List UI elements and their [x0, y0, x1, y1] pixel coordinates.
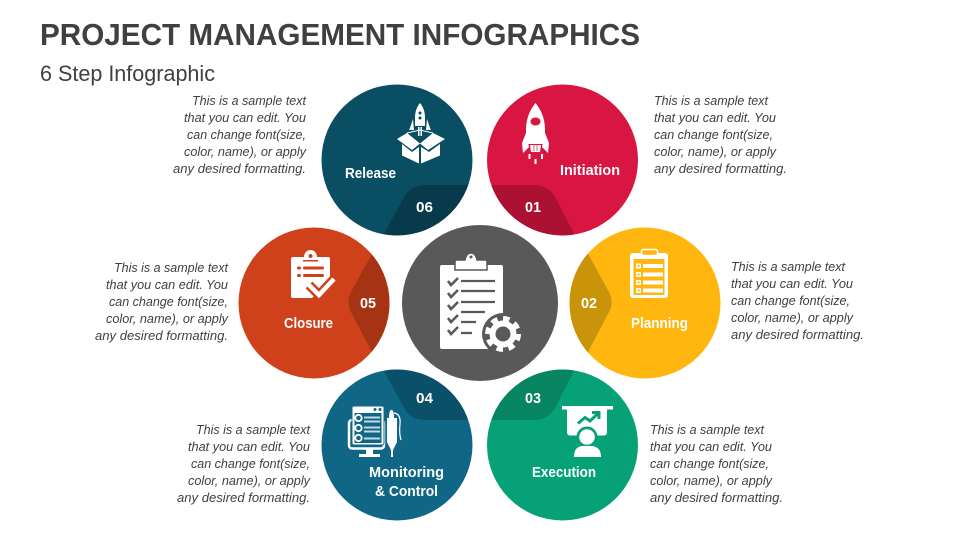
text block: initiation: can change font(size, — [654, 128, 773, 142]
number tab 02 — [570, 254, 612, 352]
panel: step 06 release — [322, 84, 472, 236]
icon: clipboard with check — [291, 250, 334, 298]
text block: closure: This is a sample text — [114, 261, 229, 275]
number tab 05 — [348, 254, 390, 352]
label Planning: Planning — [631, 316, 688, 332]
panel: step 02 planning — [560, 228, 720, 378]
label Closure: Closure — [284, 316, 333, 332]
text block: execution: This is a sample text — [650, 423, 765, 437]
number 04: 04 — [416, 390, 434, 407]
title: PROJECT MANAGEMENT INFOGRAPHICS — [40, 17, 640, 52]
label Execution: Execution — [532, 465, 596, 481]
subtitle: 6 Step Infographic — [40, 61, 215, 86]
icon: monitor and pen — [349, 406, 401, 457]
text block: release: color, name), or apply — [184, 145, 307, 159]
text block: initiation — [654, 94, 787, 176]
icon: rocket and box — [397, 103, 445, 164]
text block: execution: that you can edit. You — [650, 440, 772, 454]
icon: planning clipboard — [630, 250, 668, 298]
text block: closure — [95, 261, 229, 343]
text block: release: that you can edit. You — [184, 111, 306, 125]
text block: initiation: any desired formatting. — [654, 162, 787, 176]
number tab 06 — [384, 185, 468, 236]
icon: checklist clipboard with gear — [440, 253, 524, 355]
text block: initiation: color, name), or apply — [654, 145, 777, 159]
text block: monitoring — [177, 423, 311, 505]
text block: monitoring: can change font(size, — [191, 457, 310, 471]
text block: planning: any desired formatting. — [731, 328, 864, 342]
text block: release: can change font(size, — [187, 128, 306, 142]
text block: planning: can change font(size, — [731, 294, 850, 308]
label Monitoring & Control: Monitoring — [369, 465, 444, 481]
number tab 01 — [491, 185, 574, 236]
text block: planning: that you can edit. You — [731, 277, 853, 291]
text block: initiation: that you can edit. You — [654, 111, 776, 125]
label Monitoring & Control — [369, 465, 444, 500]
text block: release — [173, 94, 307, 176]
text block: monitoring: color, name), or apply — [188, 474, 311, 488]
text block: closure: color, name), or apply — [106, 312, 229, 326]
label Initiation: Initiation — [560, 163, 620, 179]
text block: closure: that you can edit. You — [106, 278, 228, 292]
panel: step 03 execution — [487, 370, 638, 520]
text block: execution: can change font(size, — [650, 457, 769, 471]
text block: initiation: This is a sample text — [654, 94, 769, 108]
text block: execution — [650, 423, 783, 505]
text block: monitoring: that you can edit. You — [188, 440, 310, 454]
icon: presenter with chart board — [562, 406, 613, 457]
text block: closure: any desired formatting. — [95, 329, 228, 343]
number 01: 01 — [525, 199, 541, 216]
number 05: 05 — [360, 295, 376, 312]
number 03: 03 — [525, 390, 541, 407]
text block: release: This is a sample text — [192, 94, 307, 108]
panel: step 01 initiation — [487, 84, 638, 236]
text block: execution: any desired formatting. — [650, 491, 783, 505]
text block: execution: color, name), or apply — [650, 474, 773, 488]
label Monitoring & Control: & Control — [375, 484, 438, 500]
text block: release: any desired formatting. — [173, 162, 306, 176]
label Release: Release — [345, 166, 396, 182]
text block: monitoring: This is a sample text — [196, 423, 311, 437]
text block: closure: can change font(size, — [109, 295, 228, 309]
number tab 04 — [384, 370, 468, 420]
icon: rocket — [522, 103, 549, 164]
number 02: 02 — [581, 295, 597, 312]
panel: step 04 monitoring and control — [322, 370, 472, 520]
text block: planning: This is a sample text — [731, 260, 846, 274]
panel: step 05 closure — [238, 228, 400, 378]
text block: monitoring: any desired formatting. — [177, 491, 310, 505]
number 06: 06 — [416, 199, 433, 216]
text block: planning: color, name), or apply — [731, 311, 854, 325]
number tab 03 — [491, 370, 574, 420]
text block: planning — [731, 260, 864, 342]
panel: center hub — [402, 225, 558, 381]
